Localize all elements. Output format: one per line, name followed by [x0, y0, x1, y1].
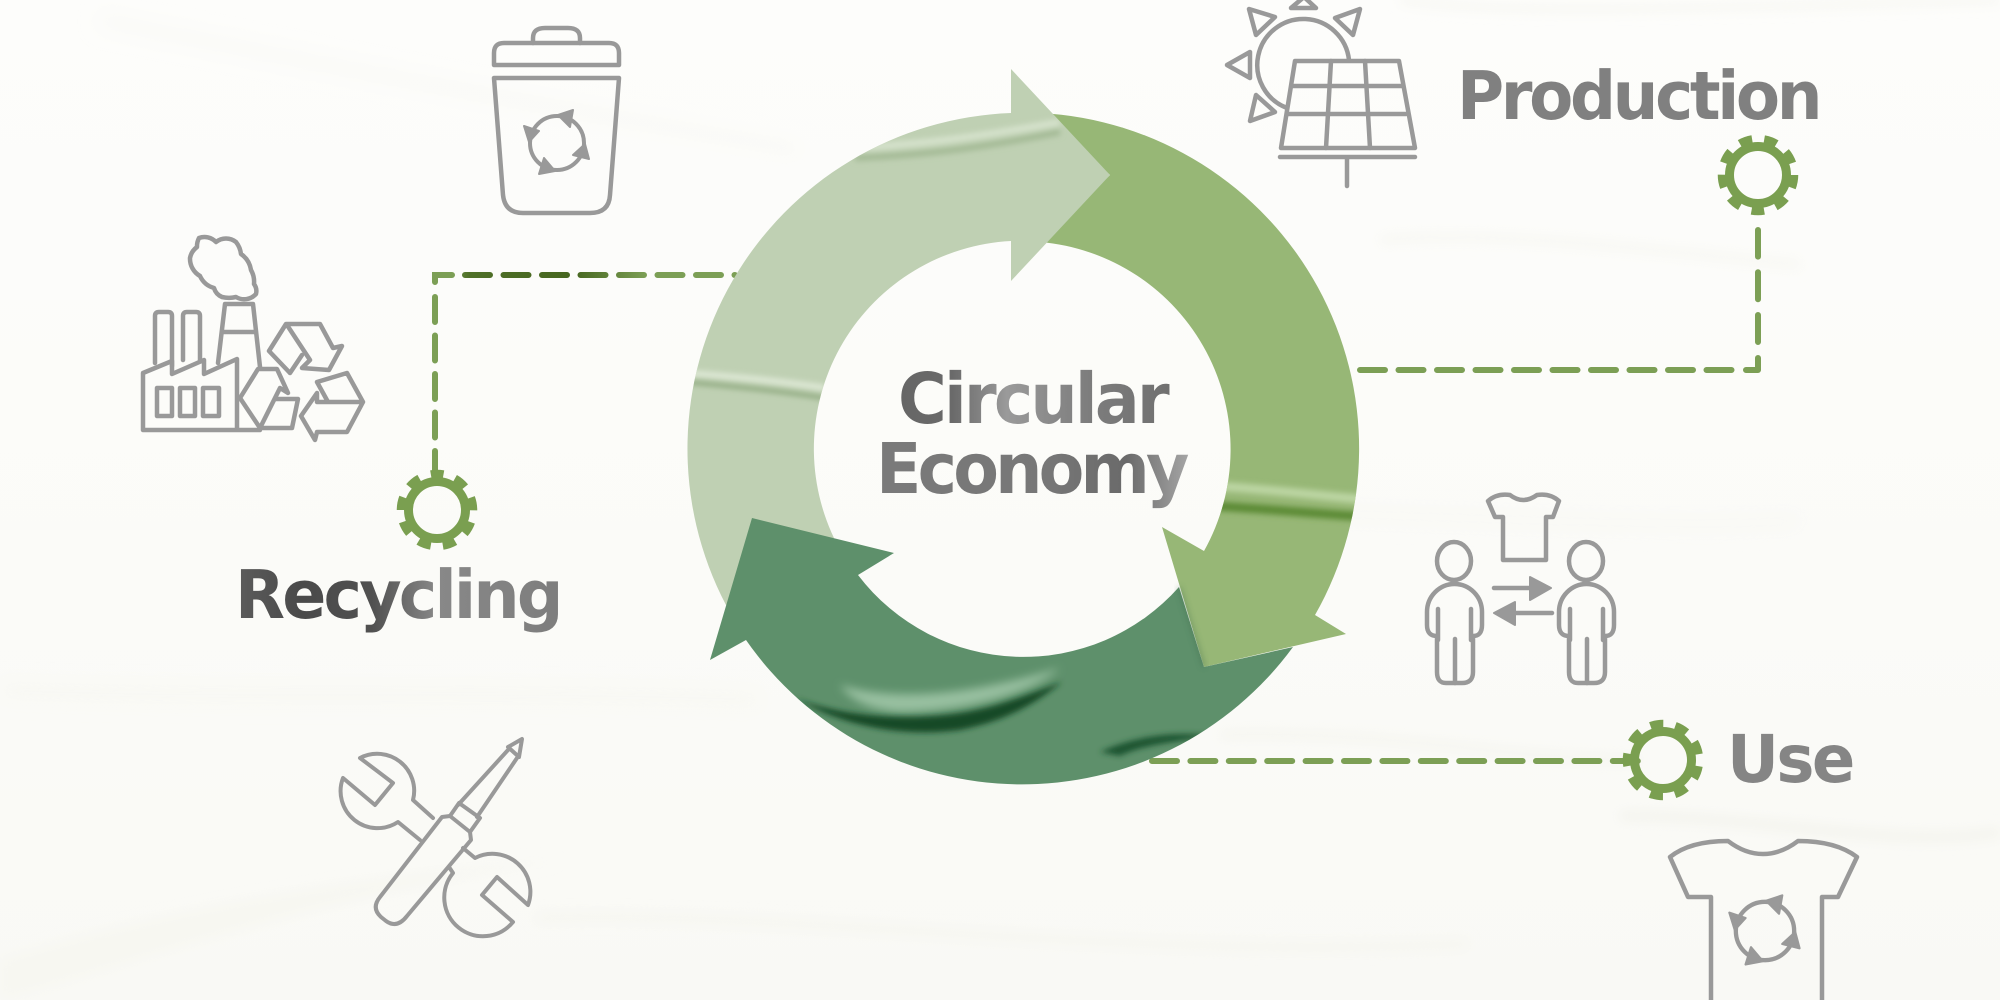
dashed connector: production	[1360, 230, 1758, 370]
icon: solar panel and sun	[1227, 0, 1415, 186]
dashed connector: use	[1152, 758, 1640, 764]
arrow segment: production (mid green)	[1040, 113, 1370, 667]
icon: gear production	[1722, 139, 1794, 211]
icon: exchange arrows	[1494, 577, 1552, 625]
heading: Use: Use	[1727, 721, 1853, 798]
icon: person left	[1427, 542, 1482, 683]
icon: small t-shirt	[1488, 495, 1559, 560]
cycle ring	[686, 69, 1370, 784]
arrow segment: use (dark green)	[710, 518, 1293, 784]
icon: gear recycling	[401, 474, 473, 546]
title: Circular Economy: Economy	[876, 428, 1189, 510]
title: Circular Economy: Circular	[898, 358, 1170, 440]
icon: gear use	[1627, 724, 1699, 796]
icon: large t-shirt with recycling	[1670, 841, 1857, 1000]
icon: factory with recycling	[143, 237, 363, 440]
icon: person right	[1559, 542, 1614, 683]
heading: Recycling: Recycling	[235, 556, 561, 634]
icon: recycling bin	[494, 28, 619, 213]
dashed connector: recycling	[435, 275, 735, 480]
icon: wrench and screwdriver	[341, 739, 530, 936]
heading: Production: Production	[1457, 57, 1819, 135]
title: Circular Economy	[876, 358, 1189, 510]
arrow segment: recycling (light green)	[686, 69, 1110, 605]
